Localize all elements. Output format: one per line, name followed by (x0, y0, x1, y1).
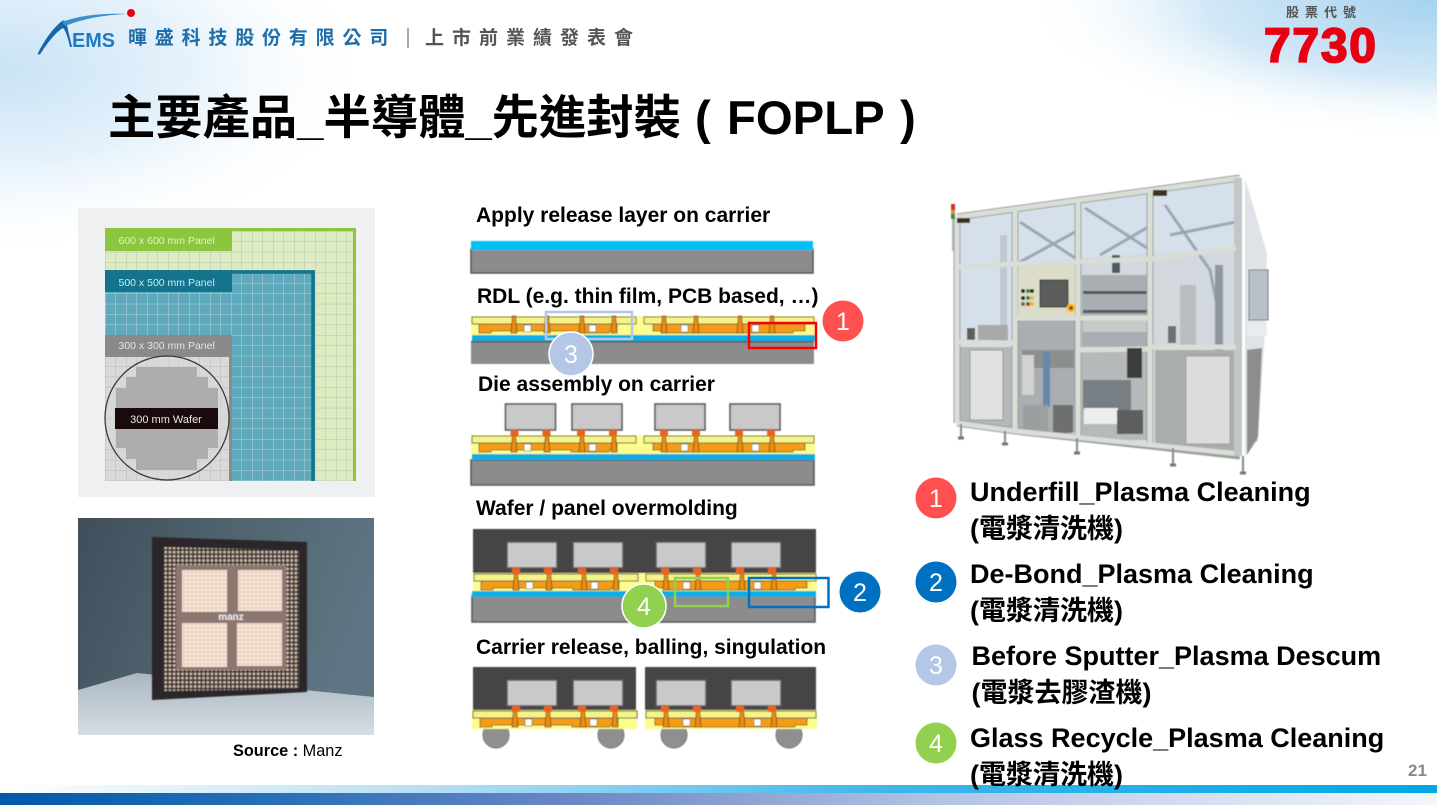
step 3 label: Die assembly on carrier (478, 373, 715, 396)
legend item 4: Glass Recycle_Plasma Cleaning (970, 723, 1384, 753)
legend item 3: Before Sputter_Plasma Descum (972, 641, 1381, 671)
legend item 3 (916, 641, 1381, 708)
callout 3: 3 (564, 341, 578, 369)
legend item 2 (916, 559, 1314, 626)
machine frame (957, 178, 1240, 456)
step 4 label: Wafer / panel overmolding (476, 497, 738, 520)
machine side (1245, 178, 1267, 457)
step 4 diagram (472, 529, 817, 622)
legend item 3: 3 (929, 652, 943, 680)
step 1 diagram (471, 241, 813, 273)
legend item 4: 4 (929, 730, 943, 758)
page number: 21 (1408, 761, 1427, 780)
panel: FOPLP process flow (471, 204, 880, 748)
step 2 diagram (471, 316, 815, 364)
panel: panel-size comparison (78, 208, 375, 497)
legend item 3: (電漿去膠渣機) (972, 678, 1151, 708)
machine legs (958, 424, 1256, 473)
legend item 1 (916, 477, 1311, 544)
step 3 diagram (471, 404, 815, 485)
step 2 label: RDL (e.g. thin film, PCB based, …) (477, 285, 818, 308)
stack light (951, 204, 955, 251)
legend item 2: (電漿清洗機) (970, 596, 1123, 626)
callout 1 (749, 300, 864, 348)
title: ( (695, 92, 711, 145)
panel: process legend (916, 477, 1384, 790)
callout 4 (622, 578, 728, 628)
600 mm panel (105, 228, 356, 481)
panel: plasma cleaning machine (951, 178, 1268, 473)
legend item 1: 1 (929, 485, 943, 513)
stock code: 股票代號 (1286, 5, 1362, 20)
footer band (0, 785, 1437, 805)
callout 4: 4 (637, 593, 651, 621)
teach pendant (1127, 348, 1142, 378)
machine lower metal bays (960, 347, 1234, 452)
callout 2: 2 (853, 579, 867, 607)
title: FOPLP (727, 92, 885, 145)
machine doors (970, 350, 1230, 444)
legend item 4 (916, 722, 1384, 790)
company logo and header text (38, 9, 641, 54)
step 1 label: Apply release layer on carrier (476, 204, 770, 227)
callout 1: 1 (836, 308, 850, 336)
machine glass body (957, 178, 1240, 457)
title: 主要產品_半導體_先進封裝 (108, 92, 681, 145)
legend item 4: (電漿清洗機) (970, 760, 1123, 790)
300 mm wafer (105, 356, 229, 480)
event name: 上市前業績發表會 (425, 26, 641, 49)
panel: Manz glass panel photo (78, 518, 374, 735)
icon: NEMS swoosh logo (38, 9, 135, 54)
step 5 diagram (472, 667, 817, 748)
company name: 暉盛科技股份有限公司 (128, 26, 396, 49)
safety sensors (957, 190, 1167, 223)
machine interior (967, 205, 1236, 440)
callout 3 (546, 312, 632, 376)
panel: Manz glass panel photo: manz (218, 612, 244, 623)
stock code: 7730 (1264, 20, 1376, 73)
500 mm panel (105, 270, 315, 481)
step 5 label: Carrier release, balling, singulation (476, 636, 826, 659)
control panel (1018, 264, 1076, 316)
icon: NEMS swoosh logo: EMS (72, 30, 115, 52)
source note: Source : Manz (233, 742, 342, 760)
legend item 1: Underfill_Plasma Cleaning (970, 477, 1311, 507)
legend item 2: 2 (929, 569, 943, 597)
legend item 2: De-Bond_Plasma Cleaning (970, 559, 1314, 589)
300 mm panel (105, 335, 232, 481)
callout 2 (749, 572, 880, 612)
title: ) (900, 92, 916, 145)
300 mm panel: 300 x 300 mm Panel (118, 340, 215, 352)
300 mm wafer: 300 mm Wafer (130, 414, 202, 426)
600 mm panel: 600 x 600 mm Panel (118, 235, 215, 247)
500 mm panel: 500 x 500 mm Panel (118, 277, 215, 289)
legend item 1: (電漿清洗機) (970, 514, 1123, 544)
